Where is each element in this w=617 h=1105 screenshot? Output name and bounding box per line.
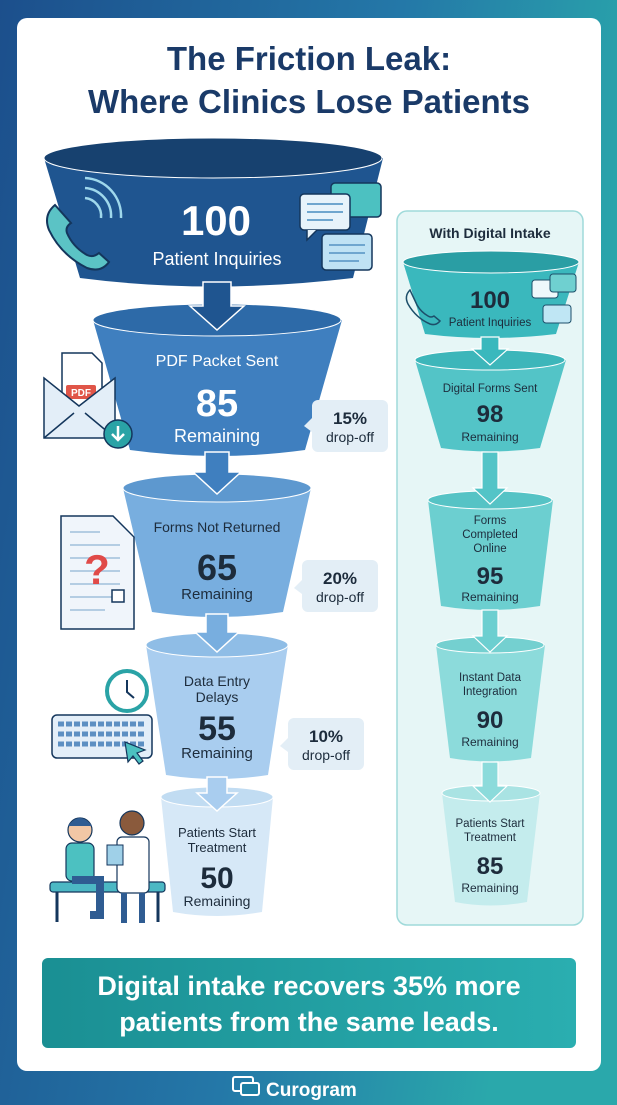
- stage 2: PDF Packet Sent 85: PDF Packet Sent: [156, 353, 279, 370]
- right stage 2: [415, 350, 566, 452]
- arrow 1: [190, 282, 244, 330]
- right stage 5: Treatment: [464, 832, 517, 844]
- icon: patient and doctor: [50, 811, 165, 923]
- right stage 4: Integration: [463, 686, 517, 698]
- right stage 1: [403, 251, 579, 338]
- stage 3: Forms Not Returned 65: [123, 474, 311, 617]
- footer logo: [233, 1077, 357, 1101]
- right stage 4: Instant Data: [459, 672, 522, 684]
- right stage 4: Remaining: [461, 735, 519, 749]
- arrow 4: [197, 777, 237, 811]
- left funnel: [44, 138, 383, 916]
- icon: phone: [47, 178, 121, 270]
- right stage 5: Remaining: [461, 881, 519, 895]
- banner callout: [42, 958, 576, 1048]
- right stage 3: Forms: [474, 515, 507, 527]
- stage 2: PDF Packet Sent 85: Remaining: [174, 426, 260, 446]
- stage 3: Forms Not Returned 65: 65: [197, 547, 237, 588]
- banner callout: Digital intake recovers 35% more: [97, 971, 521, 1001]
- right stage 1: Patient Inquiries: [449, 317, 531, 329]
- stage 1: 100 Patient Inquiries: [44, 138, 383, 286]
- right stage 2: Digital Forms Sent: [443, 383, 538, 395]
- callout: 15% drop-off: 15%: [333, 409, 367, 428]
- stage 5: Patients Start Treatment 50: Patients Start: [178, 825, 256, 840]
- callout: 20% drop-off: [294, 560, 378, 612]
- icon: PDF envelope: PDF: [71, 388, 91, 399]
- icon: keyboard clock: [52, 671, 152, 764]
- callout: 10% drop-off: [280, 718, 364, 770]
- right stage 3: 95: [477, 563, 503, 590]
- callout: 10% drop-off: 10%: [309, 727, 343, 746]
- stage 1: 100 Patient Inquiries: 100: [181, 197, 251, 244]
- right stage 3: Remaining: [461, 590, 519, 604]
- icon: form question: ?: [84, 546, 110, 593]
- right stage 3: [428, 491, 553, 610]
- right arrow 1: [472, 337, 508, 365]
- right arrow 4: [473, 762, 507, 802]
- stage 2: PDF Packet Sent 85: [93, 304, 342, 456]
- stage 4: Data Entry Delays 55: Remaining: [181, 745, 253, 762]
- stage 1: 100 Patient Inquiries: Patient Inquiries: [152, 249, 282, 269]
- arrow 2: [193, 452, 241, 494]
- stage 2: PDF Packet Sent 85: 85: [196, 383, 238, 425]
- stage 5: Patients Start Treatment 50: [161, 787, 273, 916]
- title: Where Clinics Lose Patients: [88, 83, 530, 120]
- icon: PDF envelope: [44, 353, 132, 448]
- right stage 5: [442, 785, 540, 906]
- stage 5: Patients Start Treatment 50: Remaining: [184, 893, 250, 909]
- stage 3: Forms Not Returned 65: Remaining: [181, 586, 253, 603]
- stage 4: Data Entry Delays 55: Data Entry: [184, 673, 250, 689]
- footer logo: Curogram: [266, 1080, 357, 1101]
- right stage 4: [436, 637, 545, 762]
- right arrow 2: [473, 452, 507, 504]
- heading: With Digital Intake: [429, 225, 551, 241]
- title: [88, 40, 530, 120]
- right stage 2: Remaining: [461, 430, 519, 444]
- stage 5: Patients Start Treatment 50: Treatment: [188, 840, 247, 855]
- callout: 15% drop-off: [304, 400, 388, 452]
- right arrow 3: [473, 610, 507, 652]
- stage 4: Data Entry Delays 55: Delays: [196, 689, 238, 705]
- right stage 2: 98: [477, 401, 503, 428]
- stage 4: Data Entry Delays 55: [146, 633, 288, 779]
- stage 5: Patients Start Treatment 50: 50: [200, 862, 234, 895]
- icon: chat bubbles: [300, 183, 381, 270]
- arrow 3: [195, 614, 239, 652]
- panel: With Digital Intake: [397, 211, 583, 925]
- right stage 3: Online: [473, 543, 507, 555]
- icon: form question: [61, 516, 134, 629]
- stage 4: Data Entry Delays 55: 55: [198, 710, 236, 748]
- callout: 10% drop-off: drop-off: [302, 747, 350, 763]
- right stage 4: 90: [477, 707, 503, 734]
- banner callout: patients from the same leads.: [119, 1007, 499, 1037]
- right stage 3: Completed: [462, 529, 518, 541]
- right stage 1: 100: [470, 287, 510, 314]
- right stage 5: Patients Start: [455, 818, 525, 830]
- callout: 20% drop-off: drop-off: [316, 589, 364, 605]
- callout: 15% drop-off: drop-off: [326, 429, 374, 445]
- callout: 20% drop-off: 20%: [323, 569, 357, 588]
- stage 3: Forms Not Returned 65: Forms Not Returned: [154, 519, 280, 535]
- title: The Friction Leak:: [167, 40, 451, 77]
- right stage 5: 85: [477, 853, 503, 880]
